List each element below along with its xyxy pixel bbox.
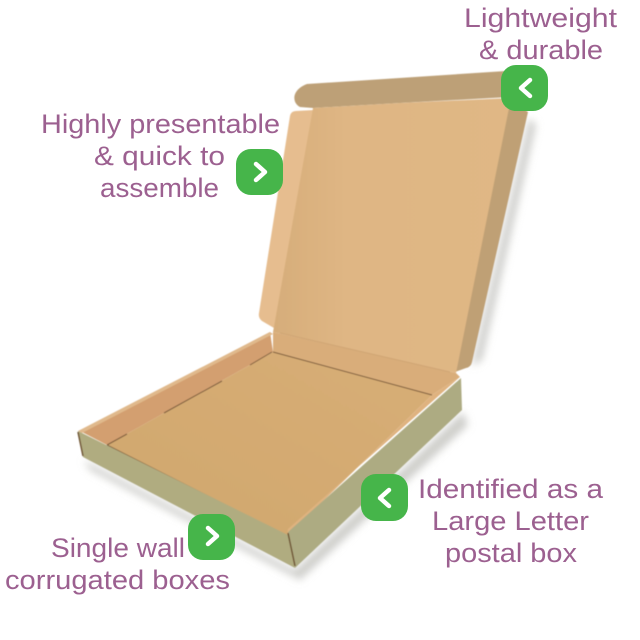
- callout: highly presentable: [41, 109, 283, 203]
- lid top flap: [294, 71, 510, 108]
- floor seam lines: [107, 352, 432, 536]
- callout: large letter postal box: [361, 474, 604, 568]
- lid inner panel: [273, 98, 511, 373]
- callout text: [418, 474, 604, 568]
- corner seams: [78, 432, 295, 566]
- callout text: Lightweight: [464, 3, 618, 33]
- box floor: [107, 352, 432, 536]
- lid right flap: [455, 98, 528, 372]
- callout text: Identified as a: [418, 474, 604, 504]
- lid left flap: [259, 110, 314, 328]
- callout text: Highly presentable: [41, 109, 280, 139]
- box shadow: base: [84, 412, 468, 580]
- illustration: open cardboard box: [78, 71, 536, 580]
- callout text: [464, 3, 618, 65]
- callout text: & quick to: [94, 141, 225, 171]
- back inner wall: [273, 332, 460, 395]
- callout text: assemble: [100, 173, 219, 203]
- icon: left chevron badge: [501, 65, 548, 111]
- box shadow: lid: [472, 118, 536, 366]
- right inner wall: [287, 377, 460, 536]
- left inner wall: [80, 332, 273, 445]
- callout text: Single wall: [51, 533, 185, 563]
- callout text: corrugated boxes: [5, 565, 230, 595]
- icon: right chevron badge: [236, 149, 283, 195]
- callout text: postal box: [445, 538, 578, 568]
- lid fold line: [280, 333, 450, 372]
- callout: lightweight and durable: [464, 3, 618, 111]
- icon: right chevron badge: [188, 514, 235, 560]
- left rim: [78, 332, 273, 433]
- callout text: [5, 533, 230, 595]
- callout text: Large Letter: [432, 506, 589, 536]
- front outer wall: [78, 431, 295, 568]
- callout text: & durable: [479, 35, 603, 65]
- right outer wall: [288, 378, 462, 568]
- callout: single wall corrugated: [5, 514, 235, 595]
- callout text: [41, 109, 280, 203]
- icon: left chevron badge: [361, 474, 408, 521]
